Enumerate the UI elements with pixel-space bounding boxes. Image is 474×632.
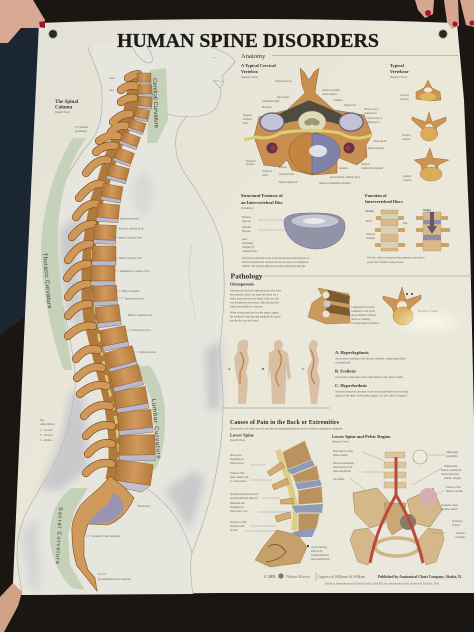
ear and jaw lines (132, 44, 224, 553)
labels: cervical vertebra: Intervertebral cartilage (disc) (330, 176, 360, 179)
footer credits (264, 572, 463, 586)
band: thoracic curvature (41, 138, 86, 370)
labels: lumbar spine: vertebrae and (230, 525, 245, 528)
heading: causes of pain (230, 420, 343, 430)
labels: pelvis: spondylitis (446, 455, 457, 458)
labels: cervical vertebra: artery (262, 174, 269, 177)
illustration: intervertebral disc: Nucleus (242, 216, 250, 219)
labels: pelvis: Degenerative (444, 465, 459, 468)
spinal cord strip (92, 250, 119, 470)
labels: lumbar spine: Areas typically (311, 546, 327, 549)
heading: typical vertebrae: Typical (390, 63, 405, 68)
labels: pelvis: spinal column (333, 454, 348, 457)
labels: cervical vertebra: spinal nerve (364, 112, 377, 115)
band: thoracic curvature: Thoracic Curvature (41, 253, 52, 310)
labels: pelvis: Arthritis (456, 532, 465, 535)
labels: lumbar spine: spinal nerve root (230, 510, 248, 513)
labels: cervical vertebra: venous plexus (322, 93, 337, 96)
labels: pelvis (333, 450, 466, 539)
labels: lumbar spine: impinging on (230, 506, 245, 509)
spine labels: Promontory (138, 505, 151, 508)
key abbreviations: T - Thoracic (40, 434, 54, 437)
labels: pelvis: Occlusion (452, 520, 463, 523)
labels: lumbar spine: Fractures of the (230, 521, 247, 524)
text: osteoporosis: bones' susceptibility to fracture. (230, 306, 263, 308)
text: disc caption: the intervertebral disc enclosed in several layers of cartilaginous (242, 261, 309, 264)
text: the spinal column: Column (55, 106, 72, 110)
labels: pelvis: Tumors of the (446, 486, 461, 489)
figure b: scoliosis: B (262, 367, 265, 371)
heading: a typical cervical vertebra: Vertebra (241, 69, 258, 74)
labels: lumbar spine: affected by (311, 550, 323, 553)
heading: function of discs: Intervertebral Discs (365, 199, 403, 204)
spine labels: Coccyx (98, 573, 107, 576)
heading: structural features: (Schematic) (241, 207, 254, 210)
text: the spinal column: prominens) (75, 130, 87, 133)
illustration: intervertebral disc: alternating (242, 242, 254, 245)
text: disc caption: laminae. The nucleus pulposus becomes dehydrated with age. (242, 265, 306, 268)
band: sacral curvature (50, 488, 88, 590)
text: function caption: The disc, which contains nucleus pulposus, functions to (367, 256, 426, 260)
labels: cervical vertebra: Roof sheath (374, 140, 387, 143)
text: compression fracture (350, 306, 380, 325)
labels: pelvis: spine and discitis (333, 470, 351, 473)
labels: pelvis: ilium or sacrum (446, 490, 462, 493)
text: disc caption: The nucleus pulposus is the central gelatinous cushioning part of (242, 257, 309, 260)
key abbreviations (40, 419, 55, 442)
heading: a typical cervical vertebra (241, 63, 276, 79)
band: sacral curvature: Sacral Curvature (54, 507, 63, 564)
labels: pelvis: of the hip (455, 536, 466, 539)
text: fractures of lamina: Fractures of lamina (418, 310, 439, 313)
text: osteoporosis: result, bones become less dense at the core and (230, 298, 279, 300)
labels: cervical vertebra: Internal vertebral (322, 89, 340, 92)
key abbreviations: C - Cervical (40, 429, 53, 432)
text: hyperlordosis: C. Hyperlordosis (335, 383, 367, 388)
spine illustration (67, 73, 155, 591)
heading: typical vertebrae: (Superior View) (390, 76, 407, 79)
key abbreviations: L - Lumbar (40, 439, 52, 442)
text: osteoporosis: the vertebral bodies become markedly biconcave (230, 316, 282, 318)
labels: lumbar spine (230, 454, 330, 561)
text: hyperlordosis: A forward (anterior) curvature of the cervical and lumbar (lower back) (335, 390, 408, 394)
spinous processes (67, 74, 138, 473)
body shading (20, 170, 222, 590)
sacrum and coccyx (72, 476, 134, 591)
footer credits: © 2003 (264, 574, 276, 579)
text: osteoporosis: Osteoporosis (230, 282, 254, 286)
band: lumbar curvature (137, 366, 165, 470)
labels: lumbar spine: and spondylolysis (311, 558, 330, 561)
text: hyperkyphosis: or hunchback). (335, 362, 351, 364)
labels: pelvis: Ankylosing (446, 451, 459, 454)
heading: structural features (241, 193, 283, 210)
posterior column (88, 76, 136, 480)
labels: cervical vertebra: Nucleus pulposus (279, 181, 297, 184)
labels: cervical vertebra: Vertebral (246, 160, 256, 163)
labels: cervical vertebra: longitudinal ligament (361, 167, 384, 170)
text: scoliosis: A curvature of the spine, often with twisting of the spinal column. (335, 376, 404, 379)
labels: cervical vertebra: Dura mater (277, 96, 289, 99)
spine labels: Spinous process (139, 351, 156, 354)
labels: lumbar spine: Herniated disc (230, 502, 246, 505)
labels: pelvis: (uterine, tumor) (441, 508, 458, 511)
text: compression fracture: Compression fractures (351, 306, 374, 309)
figure c: hyperlordosis: C (302, 367, 305, 371)
illustration: discs normal and weight: Normal (365, 210, 374, 213)
labels: lumbar spine: sacrum (230, 529, 238, 532)
text: hyperkyphosis: A. Hyperkyphosis (335, 350, 369, 355)
grommet: right (439, 30, 447, 38)
text: osteoporosis: more quickly than it can make new bone. As a (230, 294, 279, 296)
text: function caption: protect the vertebrae from pressure. (367, 261, 404, 264)
text: compression fracture: junction, resulting (350, 318, 371, 321)
labels: cervical vertebra: facet (243, 122, 248, 125)
illustration: lumbar spine causes of pain (255, 440, 323, 567)
footer credits: Published by Anatomical Chart Company, Skokie, IL (378, 575, 463, 579)
illustration: intervertebral disc: obliquity of (242, 246, 254, 249)
spine labels: Inferior vertebral notch (128, 314, 153, 317)
illustration: intervertebral disc: Annulus (242, 226, 251, 229)
band: cervical curvature (147, 68, 168, 143)
heading: lower spine lateral (230, 432, 254, 442)
heading: pathology: Pathology (230, 272, 263, 280)
text: scoliosis: B. Scoliosis (335, 368, 356, 374)
illustration: discs normal and weight (365, 209, 450, 251)
vertebra: thoracic small: vertebra (402, 138, 411, 141)
labels: lumbar spine: impinging on (230, 458, 245, 461)
spine labels: Body of vertebra (122, 290, 140, 293)
spine labels: Atlas (109, 77, 114, 80)
text: hyperkyphosis (335, 350, 406, 364)
labels: cervical vertebra (243, 80, 387, 185)
labels: pelvis: arthritic changes (444, 477, 461, 480)
human figure silhouette (17, 38, 235, 595)
labels: cervical vertebra: Annulus (339, 167, 348, 170)
text: compression fracture: in wedge-shaped vertebrae. (351, 322, 380, 325)
labels: cervical vertebra: Spinous process (275, 80, 292, 83)
labels: lumbar spine: Spondylolysis (not shown) (230, 493, 258, 496)
labels: lumbar spine: or cauda equina (230, 480, 247, 483)
spine labels: Facet for tubercle of rib (119, 228, 144, 230)
spine labels: Demifacets for heads of ribs (120, 270, 149, 273)
text: compression fracture: commonly occur at the (351, 310, 376, 313)
heading: typical vertebrae (390, 63, 409, 79)
illustration: intervertebral disc (242, 213, 345, 253)
illustration: discs normal and weight: cartilage (366, 237, 376, 240)
spine labels: Transverse process (131, 329, 151, 332)
text: scoliosis (335, 368, 404, 379)
heading: a typical cervical vertebra: (Superior View) (241, 76, 258, 79)
text: the spinal column (55, 100, 89, 133)
labels: pelvis: of iliacs (452, 524, 460, 527)
posture figures (228, 340, 320, 404)
text: osteoporosis: Osteoporosis develops when the body loses bone (230, 290, 282, 292)
spine labels: Inferior articular facet (119, 257, 142, 260)
vertebra: cervical small (400, 80, 441, 101)
labels: lumbar spine: Spondylolisthesis (shown) (230, 497, 258, 500)
hand: bottom left thumb (0, 583, 22, 632)
text: compression fracture: thoracolumbar vertebral (351, 314, 376, 317)
vertebra: thoracic small (402, 112, 446, 141)
labels: cervical vertebra: Ventral root of (367, 117, 382, 120)
text: the spinal column: The Spinal (55, 100, 79, 105)
heading: anatomy: Anatomy (241, 53, 266, 60)
labels: pelvis: Infections including (333, 462, 355, 465)
illustration: cervical vertebra (244, 68, 372, 175)
labels: lumbar spine: spinal nerves (230, 462, 244, 465)
text: osteoporosis: lose thickness at the surface. This increases the (230, 302, 280, 304)
labels: cervical vertebra: Arachnoid mater (262, 100, 280, 103)
text: the spinal column: (Lateral View) (55, 111, 70, 114)
spine labels: Sacrum (5 fused vertebrae) (92, 535, 120, 538)
heading: lower spine lateral: (Lateral View) (230, 439, 245, 442)
heading: function of discs: Function of (365, 193, 387, 198)
labels: lumbar spine: spondylolisthesis (311, 554, 329, 557)
spine labels (84, 77, 156, 581)
spine labels: Superior articular facet (118, 236, 142, 240)
heading: lower spine lateral: Lower Spine (230, 432, 254, 438)
labels: cervical vertebra: Dorsal root of (364, 108, 379, 111)
labels: cervical vertebra: Vertebral (262, 170, 272, 173)
footer credits: Medical illustrations by Dawn Gorski, MAMS, in consultation with Thomas P. Ehrlich, MD (325, 582, 440, 586)
labels: lumbar spine: spine, spinal cord, (230, 476, 249, 479)
spine labels: Axis (109, 89, 114, 92)
glare (392, 306, 468, 338)
text: osteoporosis (230, 282, 282, 322)
labels: pelvis: deterioration and (441, 473, 459, 476)
vertebra: cervical small: Cervical (400, 94, 409, 97)
labels: cervical vertebra: Spinal ganglion (368, 147, 385, 150)
heading: structural features: an Intervertebral Disc (241, 200, 283, 205)
labels: cervical vertebra: Superior (361, 163, 370, 166)
heading: lower spine and pelvis: (Anterior View) (332, 440, 349, 444)
illustration: pelvis with arteries (350, 450, 444, 565)
illustration: intervertebral disc: Area (242, 238, 248, 241)
heading: lower spine and pelvis (332, 434, 391, 444)
dark shirt behind poster (0, 22, 40, 335)
illustration: intervertebral disc: pulposus (242, 220, 251, 223)
grommet: left (49, 30, 57, 38)
vertebra: lumbar small: Lumbar (403, 175, 411, 178)
body outline (17, 47, 235, 595)
vertebra: lumbar small (403, 148, 449, 182)
text: function caption (367, 256, 426, 264)
sacral canal (88, 493, 123, 524)
footer credits: Wolters Kluwer (286, 575, 311, 579)
figure a: hyperkyphosis: A (228, 367, 231, 371)
labels: pelvis: Sacroiliitis (333, 478, 344, 481)
labels: cervical vertebra: Pia mater (262, 106, 272, 109)
spine labels: Spinal nerve pitch (120, 218, 140, 220)
vertebra: cervical small: vertebra (400, 98, 409, 101)
text: hyperkyphosis: An excessive rounding of the thoracic vertebral column (hunchback (335, 358, 406, 360)
spine labels: (4 rudimentary fused vertebrae) (98, 578, 131, 581)
labels: cervical vertebra: spinal nerve (367, 121, 380, 124)
heading: function of discs (365, 193, 403, 204)
illustration: fractured vertebra (383, 287, 421, 325)
text: the spinal column: C7 (Vertebra (75, 126, 89, 129)
key abbreviations: Key (40, 419, 45, 422)
text: hyperlordosis (335, 383, 408, 398)
hand: top right (415, 0, 474, 29)
labels: lumbar spine: Tumors of the (230, 472, 245, 475)
band: cervical curvature: Cervical Curvature (151, 78, 159, 129)
text: hyperlordosis: regions of the spine. In the lumbar region, it is also called "swayback." (335, 394, 408, 398)
labels: pelvis: disease causing disc (441, 469, 463, 472)
labels: cervical vertebra: Superior (243, 114, 252, 117)
labels: cervical vertebra: Vertebral body (279, 173, 295, 176)
illustration: intervertebral disc: collagen fibers (242, 250, 257, 253)
title: HUMAN SPINE DISORDERS (117, 31, 379, 52)
labels: cervical vertebra: Anterior longitudinal ligament (319, 182, 351, 185)
illustration: discs normal and weight: Body (366, 220, 372, 223)
illustration: discs normal and weight: Articular (366, 233, 375, 236)
labels: pelvis: Bone tumors of the (333, 450, 354, 453)
heading: structural features: Structural Features of (241, 193, 283, 198)
heading: lower spine and pelvis: Lower Spine and Pelvic Region (332, 434, 391, 439)
illustration: discs normal and weight: Weight (423, 209, 431, 212)
labels: pelvis: tuberculosis of the (333, 466, 353, 469)
heading: typical vertebrae: Vertebrae (390, 69, 409, 74)
text: osteoporosis: When osteoporosis involves the lumbar region, (230, 312, 279, 314)
key abbreviations: Abbreviations (40, 423, 55, 426)
illustration: discs normal and weight: Disc (403, 222, 409, 225)
band: lumbar curvature: Lumbar Curvature (150, 399, 161, 460)
vertebra: lumbar small: vertebra (403, 179, 412, 182)
labels: cervical vertebra: articular (243, 118, 252, 121)
vertebral bodies and discs (91, 73, 155, 493)
vertebra: thoracic small: Thoracic (402, 134, 412, 137)
heading: a typical cervical vertebra: A Typical Cervical (241, 63, 276, 68)
illustration: osteoporotic spine segment (308, 288, 350, 324)
footer credits: Lippincott Williams & Wilkins (318, 575, 366, 579)
labels: cervical vertebra: Cannilus (333, 99, 342, 102)
labels: cervical vertebra: Pedicle (279, 166, 287, 169)
text: disc caption (242, 257, 309, 268)
heading: causes of pain: Causes of Pain in the Back or Extremities (230, 420, 340, 426)
labels: cervical vertebra: Spinal cord (344, 104, 357, 107)
spine labels: Intervertebral disc (125, 298, 145, 300)
hand: top left (0, 0, 45, 43)
illustration: intervertebral disc: fibrosus (242, 230, 250, 233)
labels: pelvis: Intrapelvic mass (441, 504, 458, 507)
labels: lumbar spine: Bone spurs (230, 454, 242, 457)
text: osteoporosis: and the discs are ballooned. (230, 320, 259, 322)
heading: causes of pain: Shown below are other causes of pain that the examining physician should consider in making the diagnosis. (230, 428, 343, 430)
labels: cervical vertebra: foramen (246, 163, 255, 166)
